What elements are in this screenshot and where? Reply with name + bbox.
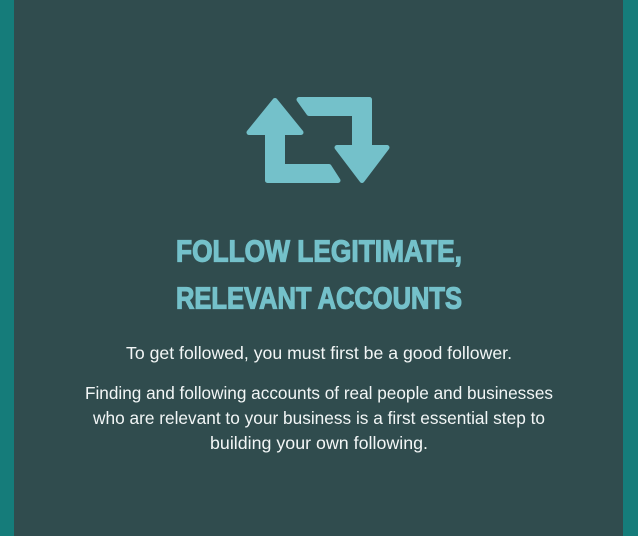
heading: RELEVANT ACCOUNTS: [176, 280, 462, 316]
icon: retweet arrows: [249, 100, 387, 180]
heading: FOLLOW LEGITIMATE,: [176, 234, 462, 268]
body text: building your own following.: [210, 433, 428, 453]
body text: who are relevant to your business is a first essential step to: [92, 408, 545, 428]
body text: To get followed, you must first be a good follower.: [126, 343, 512, 363]
body text: Finding and following accounts of real people and businesses: [85, 383, 553, 403]
body text: [85, 343, 553, 453]
heading: [176, 234, 462, 316]
